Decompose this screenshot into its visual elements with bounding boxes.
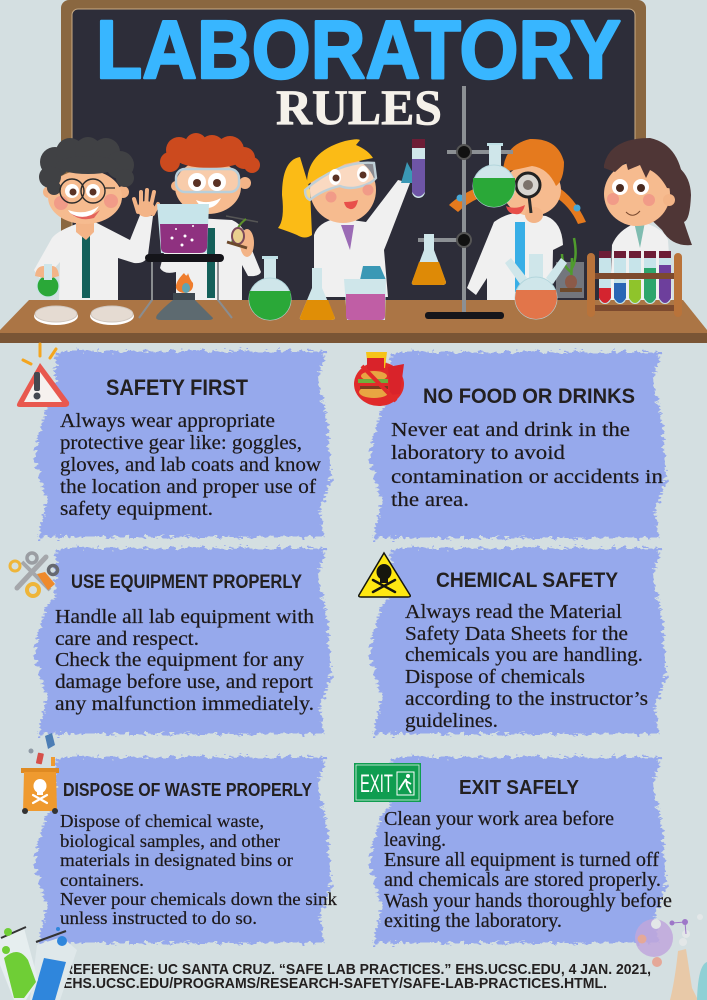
text: use equipment: Handle all lab equipment with bbox=[55, 606, 314, 628]
stand with clamps bbox=[418, 86, 513, 319]
icon: no food bbox=[354, 352, 404, 406]
heading: exit safely: EXIT SAFELY bbox=[459, 777, 580, 799]
icon: tools bbox=[10, 553, 58, 596]
text: safety first: the location and proper use of bbox=[60, 476, 316, 498]
icon: waste bin bbox=[21, 733, 59, 814]
green flask on clamp bbox=[473, 143, 515, 207]
text: safety first bbox=[60, 410, 322, 520]
text: use equipment: any malfunction immediately. bbox=[55, 693, 314, 715]
panel: use equipment properly bbox=[34, 548, 331, 734]
kid 5 bbox=[604, 138, 692, 300]
text: dispose of waste: Dispose of chemical waste, bbox=[60, 811, 264, 831]
text: dispose of waste: unless instructed to do so. bbox=[60, 908, 257, 928]
icon: exit sign: EXIT bbox=[360, 770, 393, 798]
burner and stand bbox=[139, 254, 232, 320]
text: dispose of waste: biological samples, and other bbox=[60, 831, 280, 851]
text: exit safely: Clean your work area before bbox=[384, 808, 614, 830]
test tube bbox=[412, 139, 425, 198]
title: laboratory: LABORATORY bbox=[96, 3, 621, 96]
text: exit safely: leaving. bbox=[384, 829, 446, 851]
green round flask bbox=[249, 256, 291, 320]
text: use equipment bbox=[55, 606, 314, 715]
text: exit safely bbox=[384, 808, 672, 932]
text: dispose of waste: containers. bbox=[60, 870, 144, 890]
decoration: tubes bottom left bbox=[0, 927, 77, 1000]
chalkboard bbox=[72, 9, 635, 302]
decoration: molecules bottom right bbox=[635, 914, 707, 1000]
heading: safety first: SAFETY FIRST bbox=[106, 375, 249, 400]
beaker with purple liquid bbox=[157, 204, 209, 253]
text: safety first: safety equipment. bbox=[60, 498, 213, 520]
header illustration bbox=[0, 0, 707, 343]
reference bbox=[63, 961, 651, 992]
reference: EHS.UCSC.EDU/PROGRAMS/RESEARCH-SAFETY/SAFE-LAB-PRACTICES.HTML. bbox=[63, 975, 607, 992]
pink beaker bbox=[344, 279, 386, 320]
text: no food: laboratory to avoid bbox=[391, 442, 565, 464]
table bbox=[0, 300, 707, 343]
chalkboard frame bbox=[61, 0, 646, 302]
text: chemical safety: Always read the Material bbox=[405, 601, 622, 623]
reference: REFERENCE: UC SANTA CRUZ. “SAFE LAB PRACTICES.” EHS.UCSC.EDU, 4 JAN. 2021, bbox=[63, 961, 651, 978]
text: dispose of waste: Never pour chemicals down the sink bbox=[60, 889, 337, 909]
heading: no food or drinks: NO FOOD OR DRINKS bbox=[423, 385, 635, 408]
heading: dispose of waste properly: DISPOSE OF WASTE PROPERLY bbox=[63, 780, 312, 800]
plant in jar bbox=[556, 238, 584, 298]
text: no food: Never eat and drink in the bbox=[391, 419, 630, 441]
icon: warning triangle bbox=[17, 344, 69, 407]
heading: chemical safety: CHEMICAL SAFETY bbox=[436, 569, 618, 592]
text: chemical safety: according to the instructor’s bbox=[405, 688, 648, 710]
text: exit safely: Ensure all equipment is turned off bbox=[384, 849, 659, 871]
text: no food: contamination or accidents in bbox=[391, 466, 663, 488]
three-neck flask bbox=[505, 254, 567, 319]
panel: dispose of waste bbox=[34, 757, 337, 943]
panel: safety first bbox=[34, 351, 331, 537]
text: safety first: protective gear like: goggles, bbox=[60, 432, 302, 454]
text: exit safely: Wash your hands thoroughly before bbox=[384, 890, 672, 912]
text: chemical safety bbox=[405, 601, 648, 732]
text: exit safely: and chemicals are stored properly. bbox=[384, 869, 661, 891]
text: no food: the area. bbox=[391, 489, 469, 511]
orange conical flask bbox=[300, 268, 335, 320]
kid 1 with glasses bbox=[34, 137, 158, 300]
text: safety first: Always wear appropriate bbox=[60, 410, 275, 432]
text: use equipment: Check the equipment for any bbox=[55, 649, 304, 671]
icon: exit sign bbox=[354, 763, 421, 802]
text: chemical safety: chemicals you are handling. bbox=[405, 644, 643, 666]
heading: use equipment properly: USE EQUIPMENT PROPERLY bbox=[71, 572, 302, 593]
text: exit safely: exiting the laboratory. bbox=[384, 910, 562, 932]
text: dispose of waste bbox=[60, 811, 337, 928]
test tube rack bbox=[587, 251, 682, 317]
orange flask on clamp bbox=[412, 234, 446, 285]
text: use equipment: care and respect. bbox=[55, 628, 199, 650]
text: chemical safety: guidelines. bbox=[405, 710, 498, 732]
panel: no food or drinks bbox=[369, 352, 666, 538]
text: chemical safety: Safety Data Sheets for the bbox=[405, 623, 628, 645]
text: chemical safety: Dispose of chemicals bbox=[405, 666, 585, 688]
text: use equipment: damage before use, and report bbox=[55, 671, 313, 693]
text: safety first: gloves, and lab coats and know bbox=[60, 454, 322, 476]
text: no food bbox=[391, 419, 663, 511]
icon: hazard skull bbox=[359, 553, 410, 597]
title: rules: RULES bbox=[276, 79, 442, 135]
panel: exit safely bbox=[369, 757, 672, 943]
panel: chemical safety bbox=[369, 548, 666, 734]
kid 3 with test tube bbox=[278, 139, 414, 297]
text: dispose of waste: materials in designated bins or bbox=[60, 850, 293, 870]
kid 2 with goggles bbox=[160, 133, 261, 300]
kid 4 with magnifier bbox=[449, 139, 586, 300]
petri dishes bbox=[34, 306, 134, 325]
